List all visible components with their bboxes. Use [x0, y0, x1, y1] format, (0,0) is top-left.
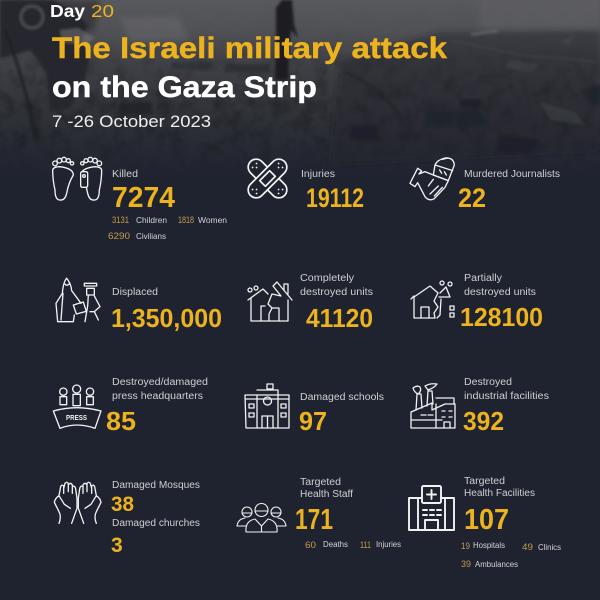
stat: murdered journalists: Murdered Journalists	[464, 169, 560, 180]
stat: destroyed industrial facilities: 392	[463, 406, 504, 436]
breakdown: Ambulances	[475, 560, 518, 569]
breakdown: 49	[522, 542, 533, 553]
label: press headquarters	[112, 391, 203, 402]
label	[300, 273, 373, 298]
label: Partially	[464, 273, 502, 284]
stat: damaged schools: 97	[299, 406, 327, 436]
icon: hospital	[409, 486, 454, 530]
icon: cracked house	[411, 281, 454, 318]
stat: completely destroyed units	[248, 273, 373, 333]
churches count: 3	[111, 534, 123, 557]
label	[464, 377, 549, 402]
churches count	[111, 518, 200, 557]
label: Destroyed/damaged	[112, 377, 208, 388]
stat: injuries: Injuries	[301, 169, 335, 180]
icon: praying hands	[54, 482, 101, 523]
label: destroyed units	[300, 287, 373, 298]
breakdown: Hospitals	[473, 541, 505, 550]
stat: completely destroyed units: 41120	[306, 305, 373, 333]
breakdown: Children	[136, 216, 167, 225]
stat: partially destroyed units: 128100	[460, 304, 543, 332]
breakdown: 60	[305, 540, 316, 551]
stat: injuries	[245, 156, 364, 213]
stat: targeted health staff: 171	[295, 504, 333, 536]
day label: 20	[91, 1, 114, 21]
mosques count	[111, 480, 200, 516]
breakdown: 1818	[178, 215, 194, 226]
stat: killed	[53, 157, 227, 242]
stat: press headquarters: 85	[106, 406, 136, 436]
title	[52, 32, 447, 104]
breakdown: Civilians	[136, 232, 166, 241]
label	[112, 377, 208, 402]
icon: crossed bandages	[245, 156, 290, 201]
icon: masked health staff	[237, 504, 286, 532]
stat: killed: 7274	[112, 182, 175, 214]
icon: hand holding microphone	[410, 158, 454, 200]
churches count: Damaged churches	[112, 518, 200, 529]
stat: targeted health facilities	[409, 476, 561, 570]
stat: partially destroyed units	[411, 273, 543, 332]
icon: press podium	[53, 385, 101, 428]
breakdown: Clinics	[538, 543, 561, 552]
label	[300, 477, 353, 500]
stat: displaced: 1,350,000	[111, 305, 222, 333]
stat: displaced	[56, 278, 222, 333]
stat: press headquarters: PRESS	[66, 413, 87, 422]
header	[50, 1, 447, 131]
stat: displaced: Displaced	[112, 287, 158, 298]
icon: factory	[411, 384, 455, 428]
mosques count: 38	[111, 493, 134, 516]
breakdown: 6290	[108, 231, 130, 242]
breakdown: 3131	[112, 215, 129, 226]
breakdown	[108, 215, 227, 242]
breakdown: Women	[198, 216, 227, 225]
label	[464, 476, 535, 499]
icon: displaced people	[56, 278, 100, 322]
icon: collapsed house	[248, 282, 292, 321]
label: Targeted	[300, 477, 341, 488]
breakdown: 111	[360, 540, 371, 551]
stat: targeted health staff	[237, 477, 401, 551]
breakdown: 39	[461, 559, 471, 570]
breakdown: 19	[461, 541, 470, 552]
stat: damaged schools	[245, 384, 384, 436]
day label	[50, 1, 114, 21]
day label: Day	[50, 1, 85, 21]
icon: feet with toe tag	[53, 157, 102, 200]
stat: destroyed industrial facilities	[411, 377, 549, 436]
date range: 7 -26 October 2023	[52, 113, 211, 131]
stat: damaged schools: Damaged schools	[300, 392, 384, 403]
label: Targeted	[464, 476, 505, 487]
stat: press headquarters	[53, 377, 208, 436]
stat: targeted health facilities: 107	[464, 504, 509, 536]
stat: mosques and churches	[54, 480, 200, 557]
breakdown: Deaths	[323, 540, 348, 549]
icon: school building	[245, 384, 289, 428]
stat: murdered journalists	[410, 158, 560, 213]
mosques count: Damaged Mosques	[112, 480, 200, 491]
background photo: rubble scene	[0, 0, 600, 154]
stat: killed: Killed	[112, 169, 138, 180]
title: on the Gaza Strip	[52, 71, 317, 104]
breakdown	[461, 541, 561, 570]
label	[464, 273, 536, 298]
label: industrial facilities	[464, 391, 549, 402]
label: Destroyed	[464, 377, 512, 388]
label: Health Staff	[300, 489, 353, 500]
stat: murdered journalists: 22	[458, 183, 486, 213]
label: Health Facilities	[464, 488, 535, 499]
breakdown	[305, 540, 401, 551]
breakdown: Injuries	[376, 540, 401, 549]
label: Completely	[300, 273, 354, 284]
label: destroyed units	[464, 287, 536, 298]
stat: injuries: 19112	[306, 183, 364, 213]
title: The Israeli military attack	[52, 32, 447, 65]
